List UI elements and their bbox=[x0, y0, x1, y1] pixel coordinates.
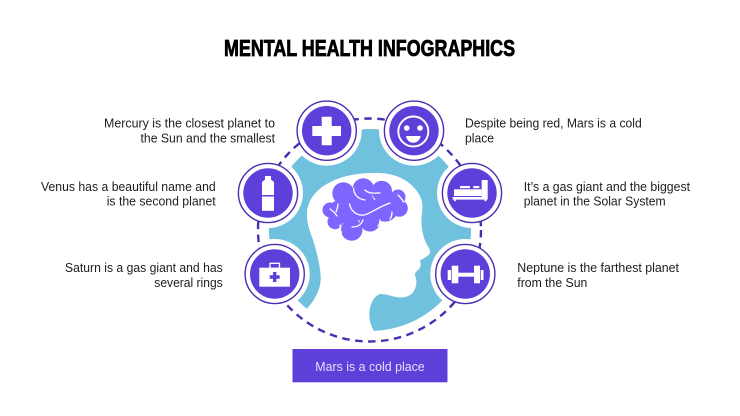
text block: Jupiter bbox=[524, 179, 690, 209]
teal circle backdrop bbox=[269, 129, 471, 331]
white head silhouette bbox=[300, 173, 430, 350]
text block: Saturn: Saturn is a gas giant and has bbox=[65, 260, 223, 275]
text block: Venus bbox=[41, 179, 216, 209]
text block: Jupiter: It’s a gas giant and the biggest bbox=[524, 179, 690, 194]
icon: smiling face bbox=[384, 101, 444, 160]
text block: Saturn: several rings bbox=[154, 275, 223, 290]
brain fold lines bbox=[330, 188, 404, 233]
text block: Mars bbox=[465, 116, 642, 146]
text block: Mercury bbox=[104, 116, 275, 146]
text block: Neptune bbox=[517, 260, 679, 290]
dashed ring connecting icons bbox=[258, 118, 481, 342]
icon: medical cross bbox=[297, 101, 356, 160]
icon: brain bbox=[322, 178, 408, 241]
icon: water bottle bbox=[238, 163, 298, 223]
text block: Venus: is the second planet bbox=[107, 194, 216, 209]
callout button: Mars is a cold place bbox=[315, 359, 425, 374]
text block: Mercury: Mercury is the closest planet to bbox=[104, 116, 275, 131]
text block: Mercury: the Sun and the smallest bbox=[140, 130, 275, 146]
icon: bed bbox=[442, 163, 502, 223]
text block: Mars: Despite being red, Mars is a cold bbox=[465, 116, 642, 131]
central figure: teal circle with head silhouette bbox=[233, 96, 507, 350]
text block: Saturn bbox=[65, 260, 223, 290]
text block: Mars: place bbox=[465, 130, 494, 146]
text block: Neptune: Neptune is the farthest planet bbox=[517, 260, 679, 275]
icon: dumbbell bbox=[436, 244, 495, 304]
text block: Neptune: from the Sun bbox=[517, 275, 587, 290]
text block: Jupiter: planet in the Solar System bbox=[524, 194, 666, 209]
title: MENTAL HEALTH INFOGRAPHICS bbox=[224, 35, 515, 61]
icon: first-aid case bbox=[245, 244, 304, 304]
callout button bbox=[292, 349, 448, 382]
text block: Venus: Venus has a beautiful name and bbox=[41, 179, 216, 194]
